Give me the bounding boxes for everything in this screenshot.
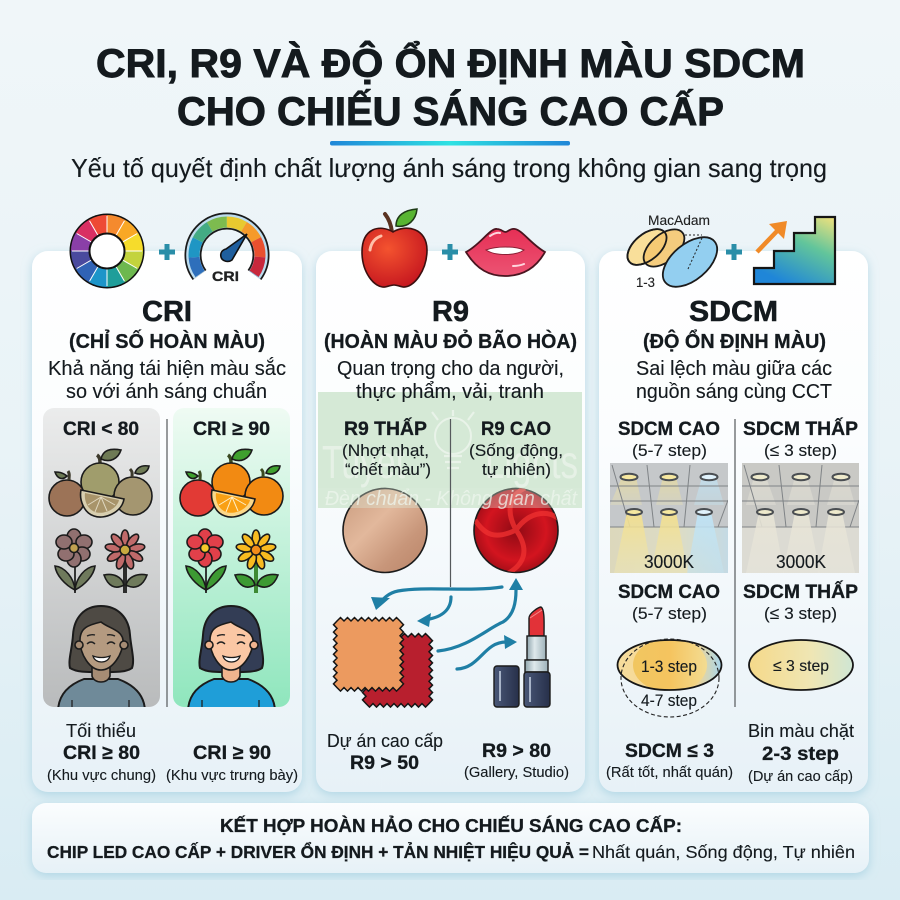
label: high R9: tự nhiên) <box>482 460 551 479</box>
icon: fabric swatches <box>334 618 432 707</box>
icon: colour wheel <box>70 214 144 288</box>
note: SDCM target: (Rất tốt, nhất quán) <box>606 764 733 781</box>
note: gallery and studio: R9 > 80 <box>482 740 551 762</box>
description: SDCM: Sai lệch màu giữa các <box>636 358 832 380</box>
icon: CRI gauge: CRI <box>212 269 239 284</box>
column: CRI below 80 <box>43 408 160 712</box>
arrows <box>371 578 523 669</box>
label: low R9 <box>342 418 431 479</box>
note: SDCM target: SDCM ≤ 3 <box>625 740 714 762</box>
watermark: Lights <box>485 436 578 488</box>
icon: CRI gauge <box>193 221 261 284</box>
icon: dull fruits <box>49 449 152 517</box>
diagram: tight colour ellipse <box>749 640 853 690</box>
description: R9 <box>337 358 564 403</box>
swatch: pale skin <box>343 488 427 572</box>
icon: yellow flower <box>235 530 278 593</box>
note: general areas: (Khu vực chung) <box>47 767 156 784</box>
icon: apple <box>362 209 427 287</box>
title underline <box>330 141 570 146</box>
icon: dull person <box>58 606 145 712</box>
column: CRI at least 90 <box>173 408 290 712</box>
icon: dull flower 2 <box>104 530 147 593</box>
label: high R9 <box>469 419 563 479</box>
description: CRI: Khả năng tái hiện màu sắc <box>48 357 286 380</box>
diagram: wide colour ellipse: 4-7 step <box>641 692 697 710</box>
icon: rising stairs <box>754 217 835 284</box>
subheading: R9: (HOÀN MÀU ĐỎ BÃO HÒA) <box>324 329 577 353</box>
illustration: inconsistent ceiling lights <box>610 463 728 573</box>
note: gallery and studio: (Gallery, Studio) <box>464 764 569 781</box>
note: tight binning: (Dự án cao cấp) <box>748 768 853 785</box>
label: high SDCM steps: SDCM CAO <box>618 582 720 603</box>
description: SDCM <box>636 358 832 403</box>
column: CRI below 80: CRI < 80 <box>63 419 139 440</box>
watermark: Tuyet <box>322 436 405 488</box>
icon: vivid fruits <box>180 449 283 517</box>
label: high R9: R9 CAO <box>481 419 551 440</box>
label: high SDCM: (5-7 step) <box>632 441 707 460</box>
label: low SDCM steps: SDCM THẤP <box>743 581 858 603</box>
label: high SDCM steps: (5-7 step) <box>632 604 707 623</box>
footer banner: CHIP LED CAO CẤP + DRIVER ỔN ĐỊNH + TẢN NHIỆT HIỆU QUẢ = <box>47 841 589 862</box>
note: general areas <box>47 721 156 784</box>
panel: SDCM <box>599 213 868 792</box>
description: CRI: so với ánh sáng chuẩn <box>66 381 267 403</box>
title: CHO CHIẾU SÁNG CAO CẤP <box>177 88 724 134</box>
diagram: tight colour ellipse: ≤ 3 step <box>773 658 829 675</box>
diagram: wide colour ellipse: 1-3 step <box>641 658 697 676</box>
note: display areas: (Khu vực trưng bày) <box>166 767 298 784</box>
icon: MacAdam ellipses: MacAdam <box>648 213 710 228</box>
description: SDCM: nguồn sáng cùng CCT <box>636 381 832 403</box>
icon: vivid person <box>188 606 275 712</box>
label: low SDCM <box>743 418 858 460</box>
title: CRI, R9 VÀ ĐỘ ỔN ĐỊNH MÀU SDCM <box>96 39 805 86</box>
note: premium projects: R9 > 50 <box>350 752 419 774</box>
label: low SDCM: SDCM THẤP <box>743 418 858 440</box>
icon: plus <box>159 244 175 260</box>
subtitle: Yếu tố quyết định chất lượng ánh sáng trong không gian sang trọng <box>71 153 827 183</box>
label: high R9: (Sống động, <box>469 441 563 460</box>
footer banner: KẾT HỢP HOÀN HẢO CHO CHIẾU SÁNG CAO CẤP: <box>220 815 682 836</box>
swatch: red silk <box>474 488 560 575</box>
icon: red flower <box>186 529 226 593</box>
footer banner <box>32 803 869 873</box>
illustration: inconsistent ceiling lights: 3000K <box>644 552 694 572</box>
icon: plus <box>442 244 458 260</box>
diagram: wide colour ellipse <box>618 638 722 717</box>
label: low SDCM steps <box>743 581 858 623</box>
icon: dull flower 1 <box>55 529 95 593</box>
illustration: consistent ceiling lights: 3000K <box>776 552 826 572</box>
note: tight binning: 2-3 step <box>762 743 839 765</box>
watermark: Đèn chuẩn - Không gian chất <box>325 488 578 510</box>
description: R9: thực phẩm, vải, tranh <box>356 381 544 403</box>
note: general areas: Tối thiểu <box>66 721 136 741</box>
heading: R9: R9 <box>432 296 469 328</box>
icon: MacAdam ellipses <box>621 213 726 296</box>
note: SDCM target <box>606 740 733 781</box>
note: premium projects <box>327 731 443 774</box>
note: premium projects: Dự án cao cấp <box>327 731 443 751</box>
heading: CRI: CRI <box>142 296 192 328</box>
note: tight binning: Bin màu chặt <box>748 721 854 741</box>
label: low SDCM: (≤ 3 step) <box>764 441 837 460</box>
label: high SDCM: SDCM CAO <box>618 419 720 440</box>
icon: lips <box>466 229 545 276</box>
note: gallery and studio <box>464 740 569 781</box>
description: CRI <box>48 357 286 403</box>
heading: SDCM: SDCM <box>689 296 778 328</box>
title <box>96 39 805 134</box>
subheading: CRI: (CHỈ SỐ HOÀN MÀU) <box>69 329 265 353</box>
label: low SDCM steps: (≤ 3 step) <box>764 604 837 623</box>
watermark background <box>318 392 582 508</box>
illustration: consistent ceiling lights <box>742 463 859 573</box>
label: high SDCM <box>618 419 720 460</box>
label: low R9: (Nhợt nhạt, <box>342 441 429 460</box>
label: low R9: R9 THẤP <box>344 418 427 440</box>
watermark <box>318 410 582 510</box>
label: low R9: “chết màu”) <box>345 460 431 479</box>
note: display areas <box>166 742 298 784</box>
subheading: SDCM: (ĐỘ ỔN ĐỊNH MÀU) <box>643 329 826 353</box>
note: general areas: CRI ≥ 80 <box>63 742 140 764</box>
column: CRI at least 90: CRI ≥ 90 <box>193 419 270 440</box>
label: high SDCM steps <box>618 582 720 623</box>
icon: plus <box>726 244 742 260</box>
note: display areas: CRI ≥ 90 <box>193 742 271 764</box>
note: tight binning <box>748 721 854 785</box>
icon: lipstick <box>494 607 550 707</box>
panel: CRI <box>32 214 302 792</box>
footer banner: Nhất quán, Sống động, Tự nhiên <box>592 842 855 862</box>
description: R9: Quan trọng cho da người, <box>337 358 564 380</box>
icon: MacAdam ellipses: 1-3 <box>636 275 655 290</box>
panel: R9 <box>316 209 585 792</box>
